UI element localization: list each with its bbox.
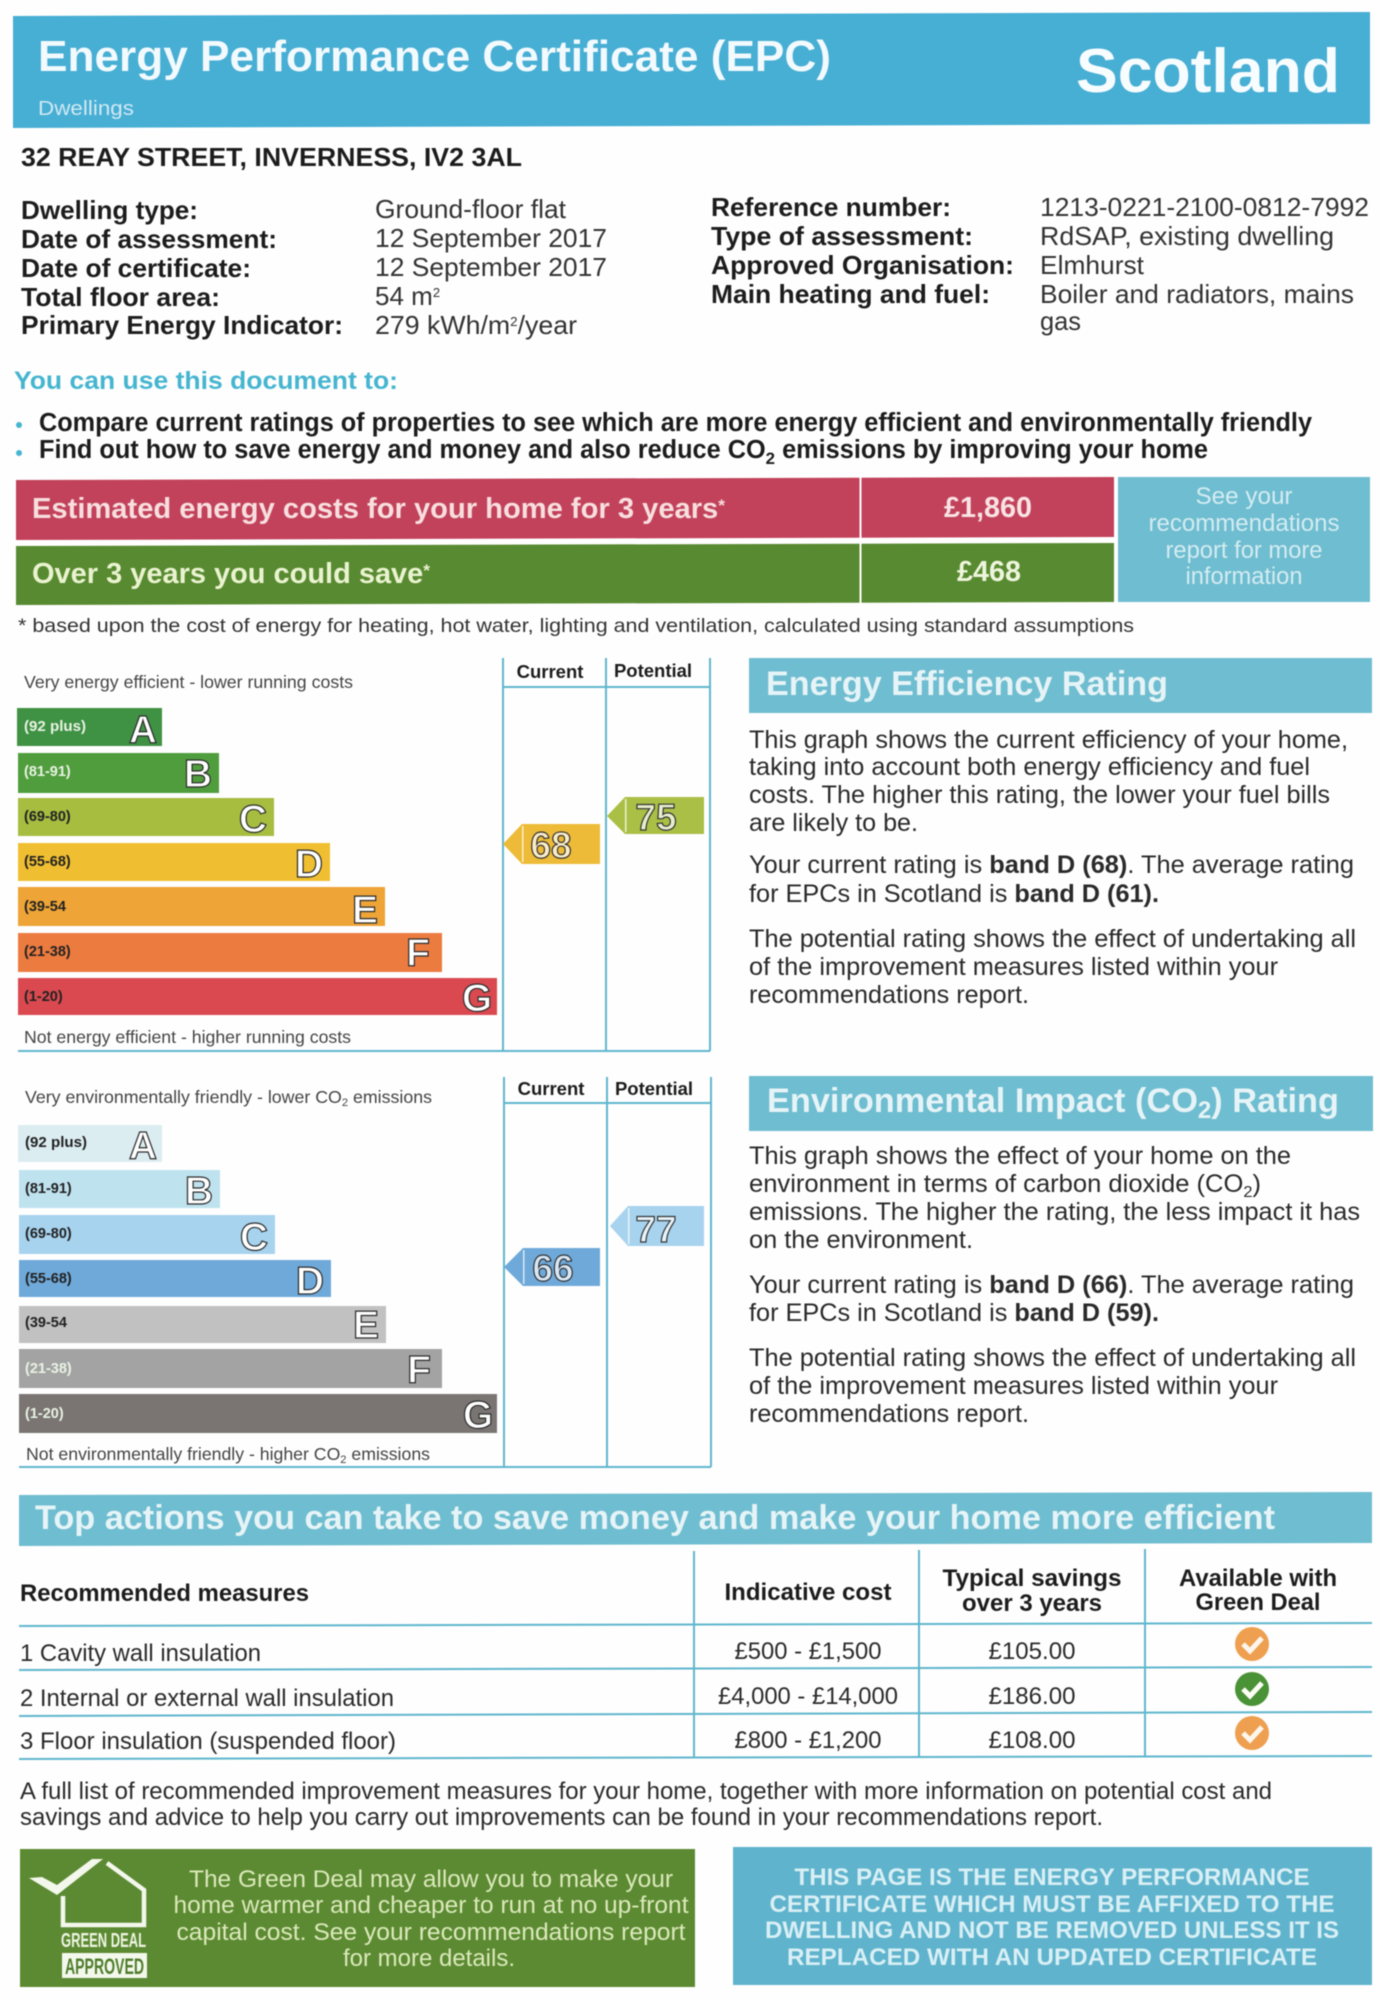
panel: environmental impact rating text: ) Rating [1211,1082,1339,1120]
band B: (81-91) [25,1181,72,1197]
banner: top actions: Top actions you can take to save money and make your home more efficient [35,1499,1275,1537]
table header: over 3 years [962,1590,1102,1617]
panel: energy efficiency rating text: The potential rating shows the effect of undertaking all [749,925,1356,953]
panel: green deal: The Green Deal may allow you to make your [189,1866,673,1893]
band B [19,1170,220,1213]
band B: B [185,1170,213,1213]
header banner [13,12,1370,128]
panel: certificate notice: DWELLING AND NOT BE REMOVED UNLESS IT IS [765,1917,1339,1944]
band D [19,1260,331,1303]
band F [18,932,442,975]
icon: green deal approved logo: GREEN DEAL [61,1930,146,1952]
panel: environmental impact rating text: emissions. The higher the rating, the less impact it has [749,1198,1360,1226]
band F [19,1349,442,1392]
band F: (21-38) [24,944,71,960]
address: 32 REAY STREET, INVERNESS, IV2 3AL [21,142,522,172]
band A: A [129,709,157,752]
callout: see your recommendations: See your [1196,483,1293,510]
row 3 [20,1716,1269,1755]
arrow: potential rating 75: 75 [635,797,677,838]
panel: certificate notice [733,1847,1372,1985]
chart: environmental impact rating: emissions [347,1444,430,1464]
header banner: Scotland [1076,36,1340,106]
band F: (21-38) [25,1361,72,1377]
dwelling details: left column: Dwelling type: [21,195,198,225]
bullet list [16,409,1313,468]
cost panel: potential saving [16,542,1114,606]
band B: B [184,753,212,796]
dwelling details: right column [711,192,1369,336]
band E: (39-54 [24,899,66,915]
table header: Typical savings [942,1565,1122,1592]
table header: Available with [1179,1565,1337,1592]
callout: see your recommendations: information [1186,563,1302,590]
table header: Indicative cost [724,1579,892,1606]
row 2: £4,000 - £14,000 [718,1683,898,1710]
dwelling details: left column: Total floor area: [21,282,220,312]
row 3: 3 Floor insulation (suspended floor) [20,1728,396,1755]
band A: (92 plus) [24,719,86,735]
icon: green deal approved logo: APPROVED [65,1954,144,1979]
band B: (81-91) [24,764,71,780]
dwelling details: left column: 2 [433,285,440,300]
chart: environmental impact rating: emissions [348,1087,432,1107]
cost panel: estimated energy costs: * [718,496,725,515]
footnote: * based upon the cost of energy for heating, hot water, lighting and ventilation, calculated using standard assumptions [18,615,1134,637]
band D: D [296,1260,324,1303]
band G: (1-20) [25,1406,64,1422]
panel: environmental impact rating text: Environmental Impact (CO [767,1082,1198,1120]
band D: D [295,843,323,886]
chart: environmental impact rating: Current [518,1078,584,1099]
band D [18,843,330,886]
dwelling details: left column: 12 September 2017 [375,223,607,253]
band F: F [407,1349,431,1392]
arrow: potential rating 75 [607,797,704,838]
header banner: Energy Performance Certificate (EPC) [38,32,831,81]
band C [19,1215,275,1259]
band C [18,798,274,841]
band G: G [462,977,492,1020]
row 1: 1 Cavity wall insulation [20,1640,261,1667]
bullet list: Find out how to save energy and money and also reduce CO [39,436,772,464]
panel: environmental impact rating text: of the improvement measures listed within your [749,1372,1278,1400]
arrow: potential rating 77 [610,1206,704,1250]
panel: energy efficiency rating text: This graph shows the current efficiency of your home, [749,726,1348,754]
text: full list of measures: A full list of recommended improvement measures for your home, together with more information on potential cost and [20,1778,1272,1805]
chart: energy efficiency rating [17,658,710,1051]
header banner: Dwellings [38,98,134,120]
chart: environmental impact rating: 2 [340,1454,347,1466]
arrow: current rating 68: 68 [530,825,572,866]
dwelling details: right column: Main heating and fuel: [711,279,990,309]
band E: E [353,1304,379,1347]
row 1 [20,1627,1269,1667]
band F: F [406,932,430,975]
band G [18,977,497,1020]
dwelling details: right column: Approved Organisation: [711,250,1014,280]
panel: environmental impact rating text: 2 [1243,1184,1253,1201]
callout: see your recommendations: report for more [1166,537,1322,564]
callout: see your recommendations: recommendations [1148,510,1340,537]
panel: energy efficiency rating text: recommendations report. [749,981,1029,1009]
row 2: £186.00 [988,1683,1076,1710]
dwelling details: left column: 279 kWh/m [375,310,506,340]
dwelling details: right column: Boiler and radiators, mains [1040,279,1354,309]
band G: (1-20) [24,989,63,1005]
bullet list: emissions by improving your home [775,436,1208,464]
row 3: £800 - £1,200 [734,1727,882,1754]
chart: environmental impact rating [18,1077,711,1467]
cost panel: potential saving: * [423,561,430,580]
dwelling details: right column: Type of assessment: [711,221,973,251]
panel: environmental impact rating text: This graph shows the effect of your home on the [749,1142,1291,1170]
chart: energy efficiency rating: Very energy efficient - lower running costs [24,672,353,692]
row 1: £105.00 [988,1638,1076,1665]
row 1: £500 - £1,500 [734,1638,882,1665]
cost panel: potential saving: £468 [957,556,1021,588]
bullet list: Compare current ratings of properties to see which are more energy efficient and environmentally friendly [39,409,1313,437]
cost panel: estimated energy costs: Estimated energy costs for your home for 3 years [32,493,706,525]
band A [17,708,162,752]
chart: energy efficiency rating: Potential [614,660,692,681]
band G: G [463,1394,493,1437]
band B [18,753,219,796]
dwelling details: left column: Date of assessment: [21,224,277,254]
band E: E [352,889,378,932]
band D: (55-68) [24,854,71,870]
text: full list of measures: savings and advice to help you carry out improvements can be found in your recommendations report. [20,1804,1103,1831]
row 3: £108.00 [988,1727,1076,1754]
chart: environmental impact rating: 2 [342,1097,348,1109]
dwelling details: right column: gas [1040,306,1081,336]
band E: (39-54 [25,1315,67,1331]
table header [20,1565,1337,1617]
panel: environmental impact rating text: The potential rating shows the effect of undertaking all [749,1344,1356,1372]
dwelling details: right column: RdSAP, existing dwelling [1040,221,1334,251]
row 2 [20,1672,1269,1712]
band C: (69-80) [25,1226,72,1242]
callout: see your recommendations [1118,477,1370,602]
band D: (55-68) [25,1271,72,1287]
chart: environmental impact rating: Not environmentally friendly - higher CO [26,1444,337,1464]
arrow: current rating 66: 66 [532,1248,574,1289]
panel: environmental impact rating text: for EPCs in Scotland is band D (59). [749,1299,1159,1327]
panel: energy efficiency rating text: costs. The higher this rating, the lower your fuel bills [749,781,1330,809]
band C: C [239,798,267,841]
dwelling details: right column: Elmhurst [1040,250,1145,280]
banner: top actions [19,1492,1372,1546]
band A: A [129,1125,157,1168]
panel: green deal [20,1849,695,1987]
panel: environmental impact rating text: on the environment. [749,1226,973,1254]
band A [18,1125,162,1168]
band C: C [240,1216,268,1259]
heading: you can use this document: You can use this document to: [14,367,398,395]
panel: certificate notice: CERTIFICATE WHICH MUST BE AFFIXED TO THE [770,1891,1334,1918]
icon: green deal approved logo [29,1859,147,1979]
panel: energy efficiency rating text: of the improvement measures listed within your [749,953,1278,981]
chart: energy efficiency rating: Not energy efficient - higher running costs [24,1027,351,1047]
dwelling details: right column: 1213-0221-2100-0812-7992 [1040,192,1369,222]
dwelling details: left column: /year [518,310,577,340]
row 2: 2 Internal or external wall insulation [20,1685,394,1712]
band G [19,1394,497,1437]
dwelling details: left column: 54 m [375,281,433,311]
band E [19,1304,386,1347]
panel: certificate notice: REPLACED WITH AN UPDATED CERTIFICATE [787,1944,1317,1971]
panel: environmental impact rating text: recommendations report. [749,1400,1029,1428]
dwelling details: left column: Primary Energy Indicator: [21,310,343,340]
table header: Recommended measures [20,1580,309,1607]
chart: energy efficiency rating: Current [517,661,583,682]
cost panel: potential saving: Over 3 years you could save [32,558,418,590]
chart: environmental impact rating: Very environmentally friendly - lower CO [25,1087,337,1107]
dwelling details: left column: 2 [510,314,518,329]
panel: environmental impact rating text: 2 [1198,1097,1211,1124]
band C: (69-80) [24,809,71,825]
dwelling details: left column: 12 September 2017 [375,252,607,282]
chart: environmental impact rating: Potential [615,1078,693,1099]
panel: energy efficiency rating text: for EPCs in Scotland is band D (61). [749,880,1159,908]
panel: certificate notice: THIS PAGE IS THE ENERGY PERFORMANCE [794,1864,1310,1891]
panel: environmental impact rating text: Your current rating is band D (66). The average rating [749,1271,1354,1299]
cost panel: estimated energy costs [16,476,1114,540]
dwelling details: left column: Ground-floor flat [375,194,567,224]
panel: energy efficiency rating text: taking into account both energy efficiency and fuel [749,753,1310,781]
panel: environmental impact rating text [749,1076,1373,1428]
table header: Green Deal [1196,1589,1320,1616]
panel: energy efficiency rating text: Your current rating is band D (68). The average rating [749,851,1354,879]
panel: energy efficiency rating text: Energy Efficiency Rating [766,665,1168,703]
cost panel: estimated energy costs: £1,860 [944,492,1032,524]
panel: green deal: for more details. [343,1945,515,1972]
text: full list of measures [20,1778,1272,1831]
arrow: potential rating 77: 77 [635,1209,677,1250]
arrow: current rating 68 [503,824,600,866]
panel: environmental impact rating text: environment in terms of carbon dioxide (CO [749,1170,1233,1198]
panel: green deal: home warmer and cheaper to run at no up-front [174,1892,689,1919]
bullet list: 2 [766,449,775,468]
arrow: current rating 66 [504,1248,600,1289]
panel: energy efficiency rating text: are likely to be. [749,809,918,837]
table: recommended measures [19,1549,1372,1759]
band A: (92 plus) [25,1135,87,1151]
band E [18,887,385,932]
dwelling details: left column: Date of certificate: [21,253,251,283]
panel: energy efficiency rating text [749,658,1372,1009]
panel: green deal: capital cost. See your recommendations report [176,1919,686,1946]
panel: environmental impact rating text: ) [1252,1170,1261,1198]
dwelling details: right column: Reference number: [711,192,951,222]
dwelling details: left column [21,194,607,340]
